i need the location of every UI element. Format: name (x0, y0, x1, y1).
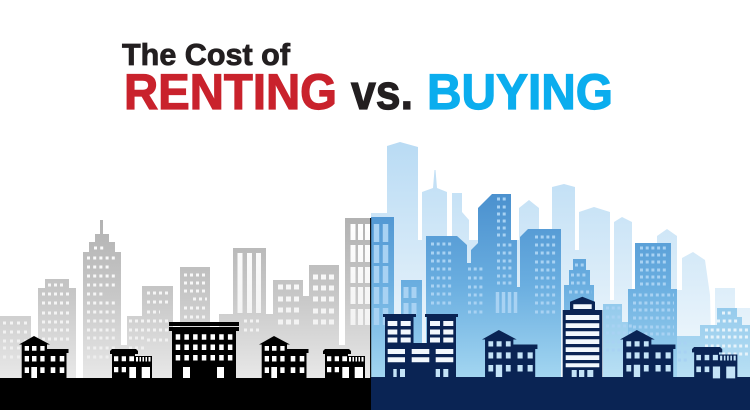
houses: buying side (383, 297, 737, 378)
icon: house 2 (110, 349, 152, 378)
icon: house 6 (620, 330, 675, 377)
title word: vs.: vs. (351, 66, 413, 120)
icon: house 4 (323, 349, 365, 378)
icon: house 7 (692, 347, 737, 378)
title line: The Cost of: The Cost of (122, 37, 291, 72)
ground: buying side (371, 377, 750, 410)
ground: renting side (0, 378, 371, 410)
title (122, 37, 613, 120)
gray skyline: renting side (0, 218, 371, 378)
icon: house 3 (259, 336, 308, 378)
blue skyline windows (376, 199, 750, 360)
title word: BUYING: BUYING (427, 64, 613, 120)
title word: RENTING: RENTING (124, 64, 337, 120)
pale skyline: buying side (371, 142, 750, 378)
blue skyline: buying side (371, 194, 750, 378)
icon: twin tower block (383, 314, 458, 378)
gray skyline windows (3, 224, 368, 357)
icon: house 1 (19, 336, 68, 378)
icon: striped tower (563, 297, 602, 378)
houses: renting side (19, 322, 365, 379)
center divider (370, 218, 371, 378)
icon: house 5 (482, 330, 537, 377)
icon: apartment block (169, 322, 239, 379)
